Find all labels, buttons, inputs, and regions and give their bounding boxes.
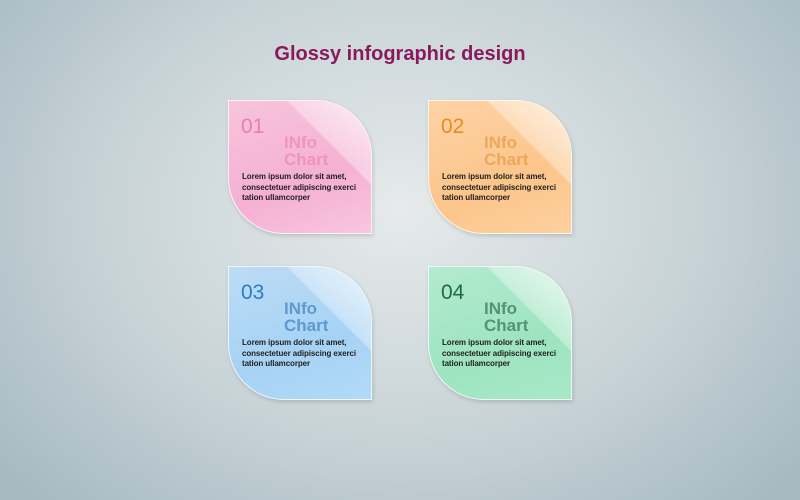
panel: card 03 — [228, 266, 372, 400]
text block: consectetuer adipiscing exerci — [242, 182, 356, 192]
text block: consectetuer adipiscing exerci — [442, 182, 556, 192]
title: Glossy infographic design — [274, 43, 526, 65]
text block — [242, 338, 356, 368]
watermark: Chart — [284, 150, 328, 169]
watermark: INfo — [484, 299, 517, 318]
text block: consectetuer adipiscing exerci — [442, 348, 556, 358]
number 03: 03 — [241, 281, 264, 304]
panel: card 02 — [428, 100, 572, 234]
watermark: INfo — [284, 299, 317, 318]
text block: Lorem ipsum dolor sit amet, — [442, 338, 546, 347]
text block: tation ullamcorper — [242, 359, 310, 368]
watermark: Chart — [484, 150, 528, 169]
text block: Lorem ipsum dolor sit amet, — [442, 172, 546, 181]
text block — [442, 172, 556, 202]
number 04: 04 — [441, 281, 464, 304]
text block: consectetuer adipiscing exerci — [242, 348, 356, 358]
watermark: INfo — [484, 133, 517, 152]
text block — [442, 338, 556, 368]
text block: tation ullamcorper — [242, 193, 310, 202]
watermark — [484, 299, 528, 335]
watermark — [484, 133, 528, 169]
watermark — [284, 299, 328, 335]
panel: card 04 — [428, 266, 572, 400]
watermark: Chart — [284, 316, 328, 335]
panel: card 01 — [228, 100, 372, 234]
number 02: 02 — [441, 115, 464, 138]
watermark — [284, 133, 328, 169]
text block: Lorem ipsum dolor sit amet, — [242, 338, 346, 347]
text block — [242, 172, 356, 202]
text block: Lorem ipsum dolor sit amet, — [242, 172, 346, 181]
watermark: INfo — [284, 133, 317, 152]
number 01: 01 — [241, 115, 264, 138]
watermark: Chart — [484, 316, 528, 335]
text block: tation ullamcorper — [442, 193, 510, 202]
text block: tation ullamcorper — [442, 359, 510, 368]
